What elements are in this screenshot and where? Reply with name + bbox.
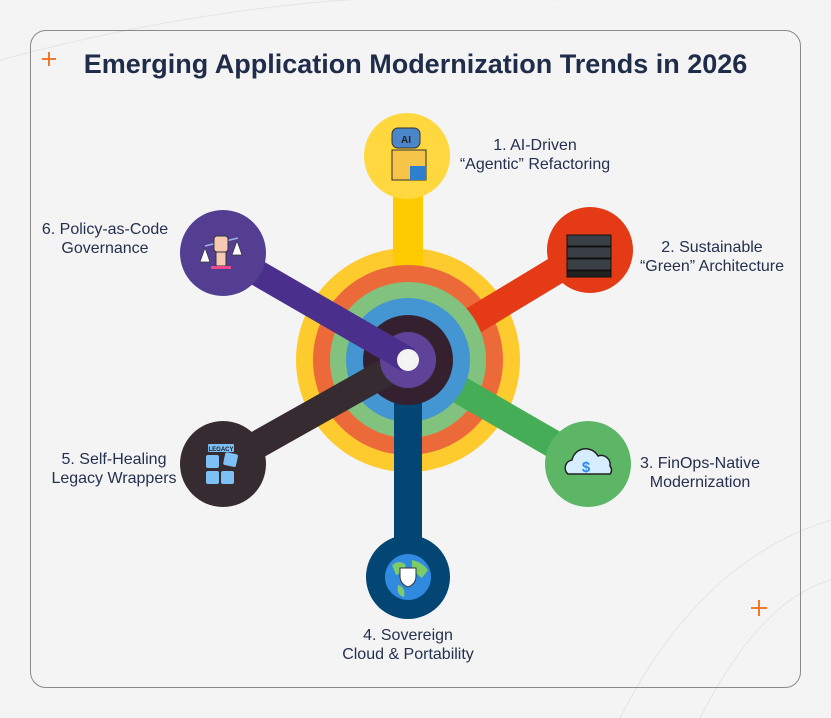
icon: legacy blocks: LEGACY bbox=[208, 447, 234, 453]
label 6: 6. Policy-as-Code bbox=[42, 221, 168, 238]
icon: servers bbox=[567, 235, 611, 277]
label 1 bbox=[460, 137, 610, 173]
label 5 bbox=[51, 451, 177, 487]
icon: scales fist bbox=[200, 236, 242, 269]
label 4 bbox=[342, 627, 474, 663]
circle 3 bbox=[545, 421, 631, 507]
label 1: 1. AI-Driven bbox=[493, 137, 577, 154]
label 2: 2. Sustainable bbox=[661, 239, 763, 256]
label 3 bbox=[640, 455, 760, 491]
circle 5 bbox=[180, 421, 266, 507]
label 4: Cloud & Portability bbox=[342, 646, 474, 663]
icon: AI robot: AI bbox=[401, 135, 411, 146]
label 3: 3. FinOps-Native bbox=[640, 455, 760, 472]
title: Emerging Application Modernization Trends in 2026 bbox=[84, 49, 747, 79]
label 5: 5. Self-Healing bbox=[62, 451, 166, 468]
label 2 bbox=[640, 239, 784, 275]
circle 2 bbox=[547, 207, 633, 293]
icon: globe shield bbox=[385, 554, 431, 600]
circle 6 bbox=[180, 210, 266, 296]
label 2: “Green” Architecture bbox=[640, 258, 784, 275]
circle 1 bbox=[364, 113, 450, 199]
icon: cloud dollar: $ bbox=[582, 459, 591, 476]
label 6: Governance bbox=[61, 240, 149, 257]
label 6 bbox=[42, 221, 168, 257]
label 5: Legacy Wrappers bbox=[51, 470, 177, 487]
circle 4 bbox=[366, 535, 450, 619]
label 4: 4. Sovereign bbox=[363, 627, 453, 644]
label 3: Modernization bbox=[650, 474, 750, 491]
label 1: “Agentic” Refactoring bbox=[460, 156, 610, 173]
